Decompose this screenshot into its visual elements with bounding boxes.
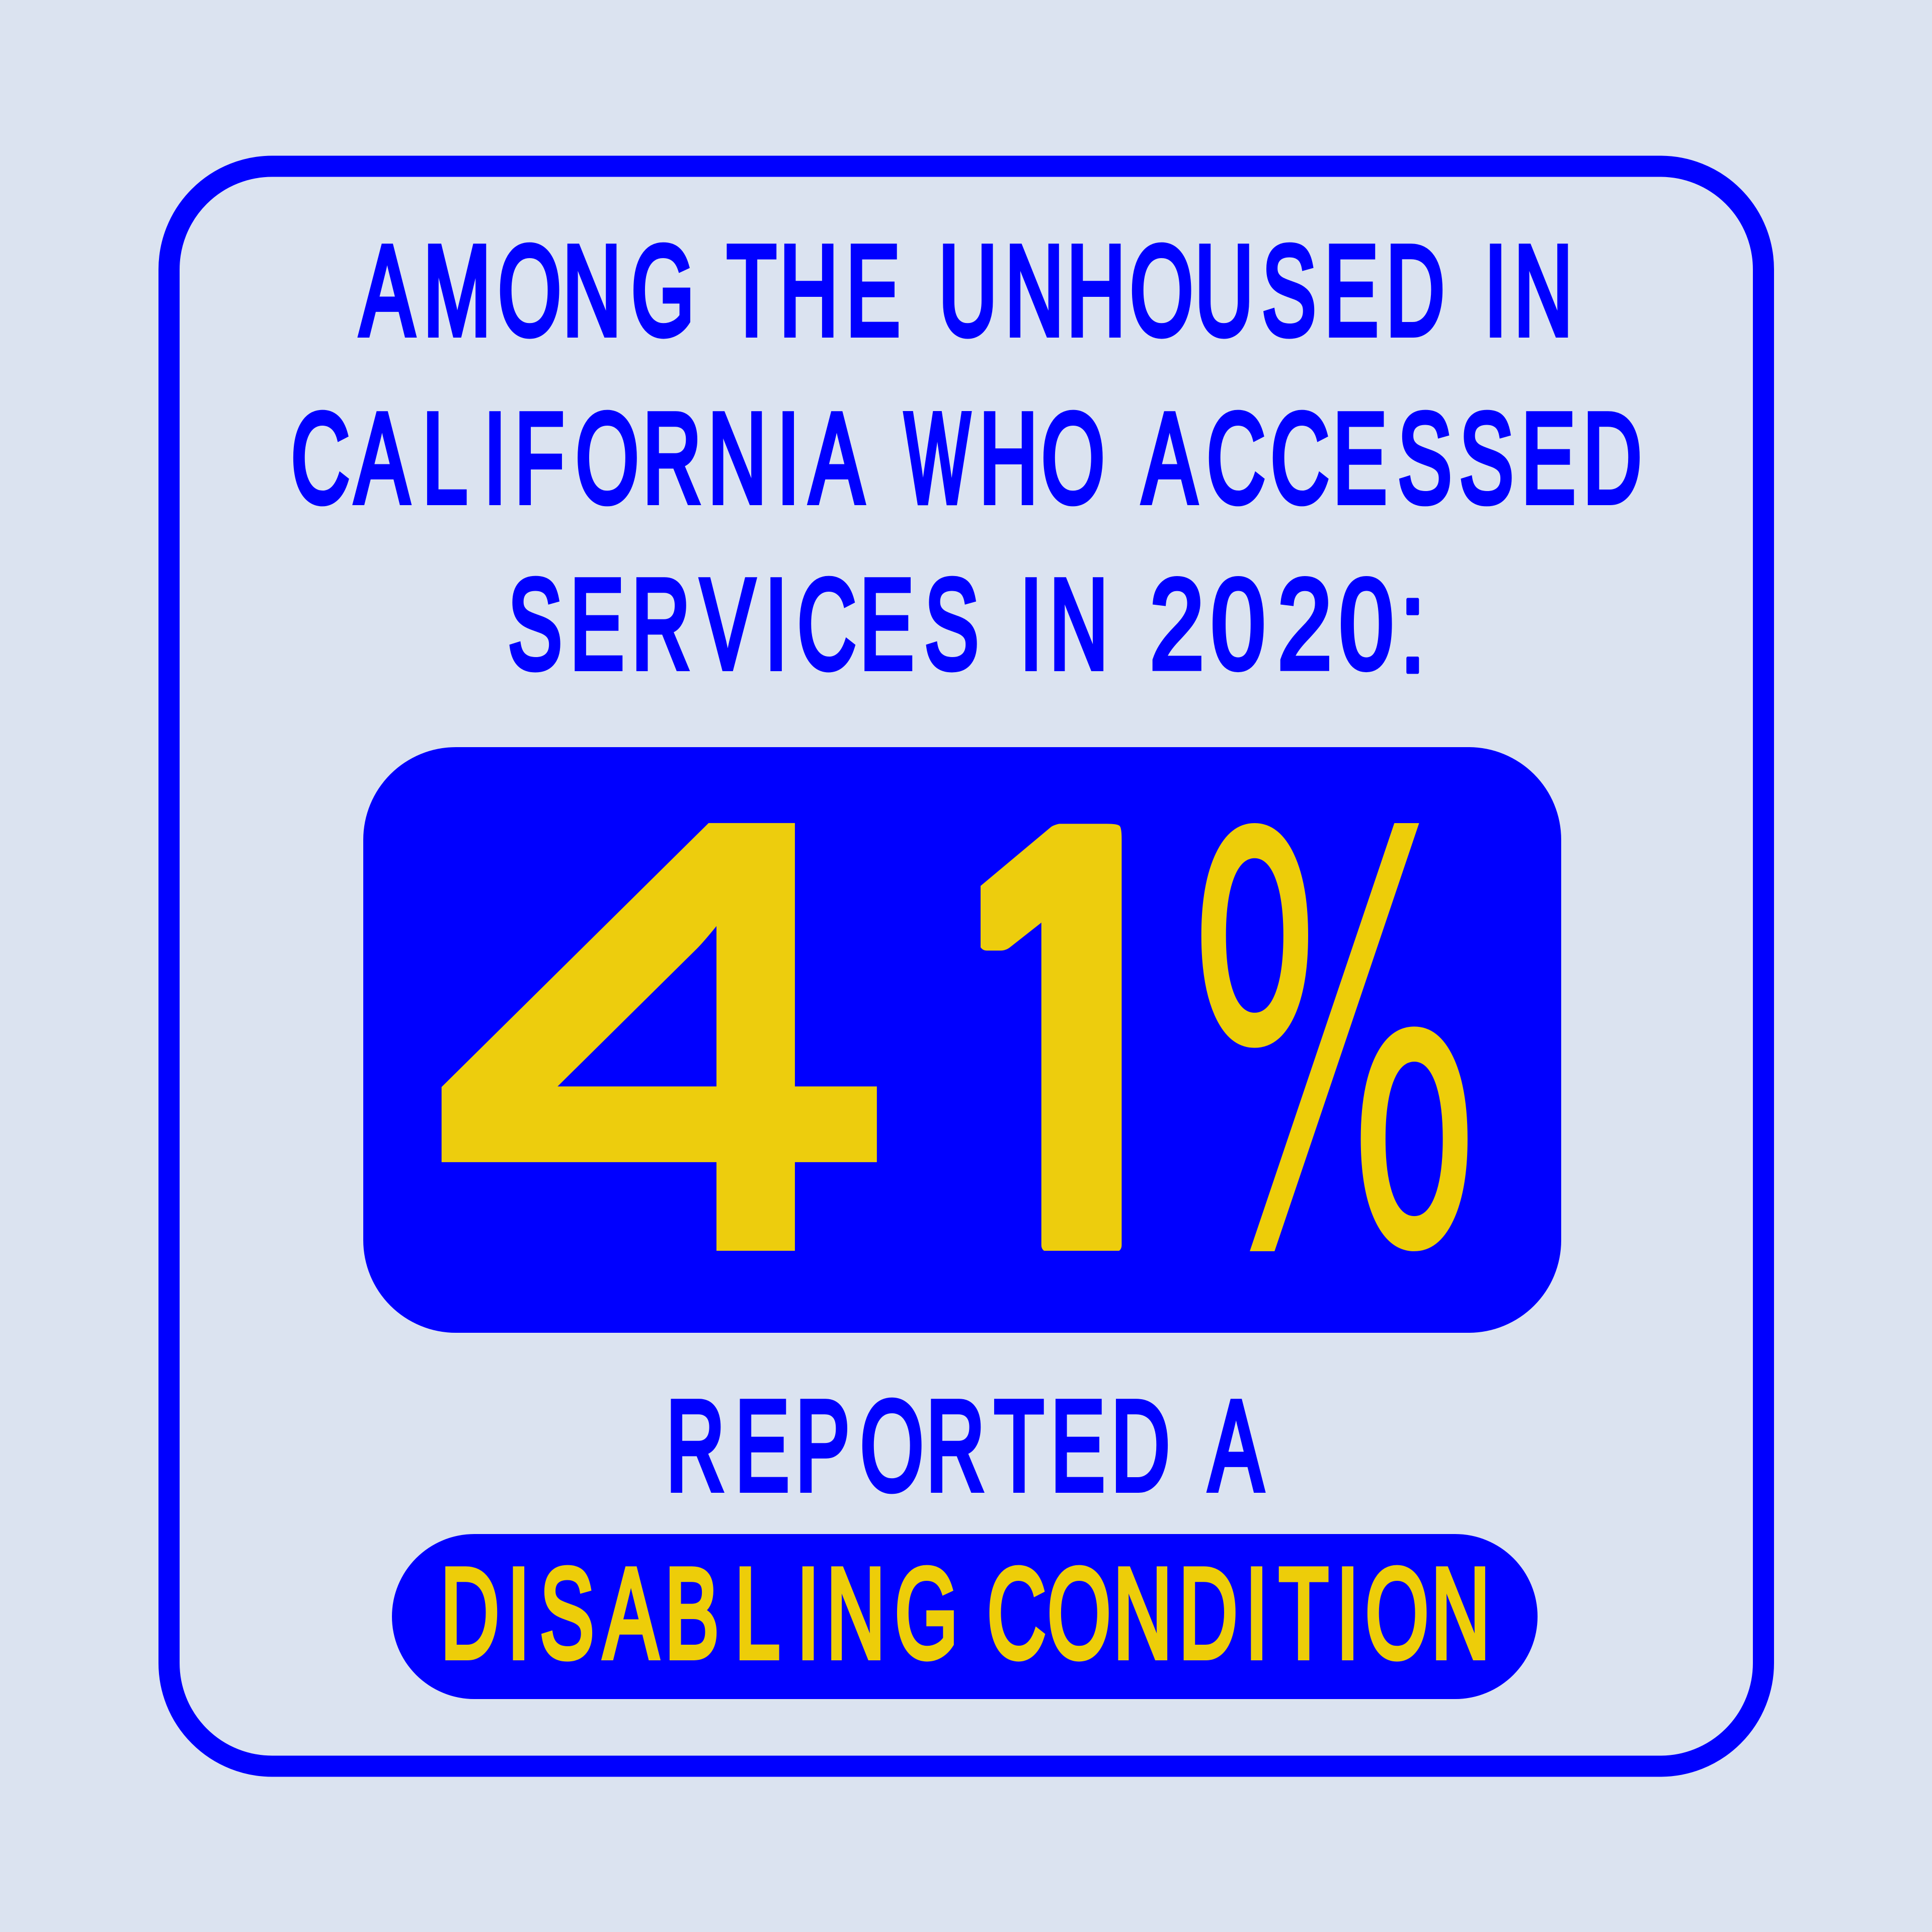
statistic digit 4: 4 [426,718,898,1353]
panel: rounded frame [169,166,1763,1766]
heading: three line intro [291,219,1642,701]
text: reported a: REPORTED A [666,1375,1263,1517]
heading line 1: AMONG THE UNHOUSED IN [360,219,1573,362]
heading line 2 [291,387,1642,530]
statistic percent sign: % [1184,718,1485,1378]
heading line 3 [508,548,1427,701]
callout: disabling condition pill: DISABLING CONDITION [441,1542,1490,1685]
heading line 2: HO ACCESSED [979,387,1642,530]
panel: statistic box [363,747,1561,1333]
heading line 2: CALIFORNIA [291,387,864,530]
heading line 3: 2020 [1150,552,1394,695]
heading line 2: W [905,387,970,530]
heading line 3: : [1398,548,1427,701]
statistic digit 1: 1 [880,777,1255,1334]
heading line 3: SERVICES IN [508,553,1108,696]
